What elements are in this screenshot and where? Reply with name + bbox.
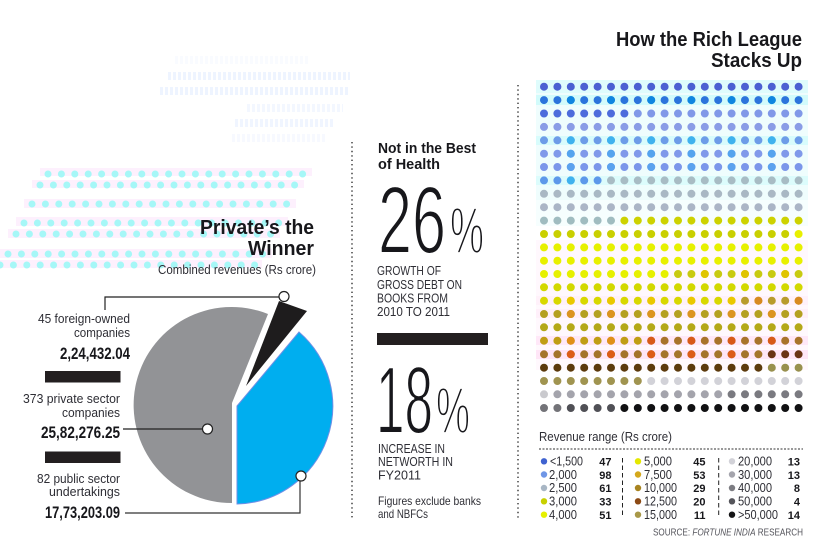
legend column 1 <box>541 454 612 522</box>
legend column 2 <box>635 454 706 522</box>
legend column 3: 13 <box>788 456 800 468</box>
label: public sector undertakings: undertakings <box>49 484 120 499</box>
heading: of Health <box>378 156 440 173</box>
label: private sector companies: 373 private sector <box>23 391 121 406</box>
leader line: foreign-owned <box>105 292 289 310</box>
dotted dividers <box>352 85 518 518</box>
halo bands <box>536 80 808 370</box>
legend column 1: 33 <box>599 496 612 508</box>
label: private sector companies: companies <box>62 405 120 420</box>
legend column 2: 5,000 <box>644 454 672 468</box>
legend column 2: 29 <box>693 483 706 495</box>
text: growth of gross debt: 2010 TO 2011 <box>377 304 450 319</box>
label: private sector companies: 25,82,276.25 <box>41 423 120 442</box>
leader line: public sector <box>125 471 306 513</box>
text: growth of gross debt: GROWTH OF <box>377 263 441 278</box>
label: foreign-owned companies: companies <box>74 325 130 340</box>
stat: 18%: % <box>436 373 470 447</box>
legend column 3: 40,000 <box>738 480 772 495</box>
legend title: Revenue range (Rs crore) <box>539 429 672 444</box>
legend column 2: 7,500 <box>644 467 672 482</box>
stat: 18%: 18 <box>376 347 433 454</box>
text: increase in networth: INCREASE IN <box>378 441 445 456</box>
label: foreign-owned companies: 2,24,432.04 <box>60 344 130 363</box>
subheading: Combined revenues: Combined revenues (Rs crore) <box>158 262 316 277</box>
legend: revenue range <box>539 429 803 522</box>
heading: How the Rich League Stacks Up: Stacks Up <box>711 50 802 72</box>
pie chart <box>134 301 333 504</box>
legend column 3: >50,000 <box>738 507 778 522</box>
bar divider 1 <box>45 371 120 382</box>
text: increase in networth: NETWORTH IN <box>378 454 453 469</box>
legend column 3: 30,000 <box>738 467 772 482</box>
text: increase in networth: FY2011 <box>378 468 421 482</box>
heading: Not in the Best <box>378 140 476 157</box>
note: figures exclude banks: and NBFCs <box>378 507 428 521</box>
dots <box>544 87 799 408</box>
source credit: SOURCE: FORTUNE INDIA RESEARCH <box>653 528 803 538</box>
text: growth of gross debt: GROSS DEBT ON <box>377 277 462 292</box>
stat: 26%: % <box>450 193 484 267</box>
panel: Not in the Best of Health <box>376 140 488 521</box>
note: figures exclude banks <box>378 494 481 521</box>
legend column 3: 13 <box>788 470 800 482</box>
ghost text artefacts <box>160 60 350 138</box>
slice: private sector <box>134 307 268 503</box>
legend column 3 <box>729 454 801 522</box>
legend column 2: 10,000 <box>644 480 677 495</box>
text: growth of gross debt <box>377 263 462 319</box>
text: growth of gross debt: BOOKS FROM <box>377 290 448 306</box>
legend column 2: 11 <box>694 510 706 522</box>
legend column 2: 12,500 <box>644 494 677 508</box>
legend column 3: 14 <box>788 510 801 522</box>
legend column 2: 15,000 <box>644 507 677 522</box>
dot matrix chart <box>536 80 808 408</box>
legend column 1: 51 <box>599 510 612 522</box>
leader line: private sector <box>123 424 212 434</box>
legend column 3: 8 <box>794 483 800 495</box>
heading: How the Rich League Stacks Up: How the Rich League <box>616 29 802 51</box>
heading: How the Rich League Stacks Up <box>616 29 802 72</box>
bar divider <box>377 333 488 345</box>
legend column 2: 20 <box>693 496 706 508</box>
stat: 26%: 26 <box>378 167 446 274</box>
note: figures exclude banks: Figures exclude banks <box>378 494 481 508</box>
label: private sector companies <box>23 391 121 442</box>
label: foreign-owned companies <box>38 311 130 363</box>
heading: Private's the Winner: Private’s the <box>200 217 314 239</box>
bar divider 2 <box>45 452 120 463</box>
slice: foreign-owned <box>246 301 307 386</box>
text: increase in networth <box>378 441 453 482</box>
ghost dot rows artefact <box>0 168 312 268</box>
legend column 3: 50,000 <box>738 494 772 508</box>
legend column 2: 45 <box>693 456 706 468</box>
legend column 1: <1,500 <box>550 454 583 468</box>
legend column 3: 20,000 <box>738 454 772 468</box>
legend column 1: 47 <box>599 456 612 468</box>
legend column 3: 4 <box>794 496 801 508</box>
label: foreign-owned companies: 45 foreign-owned <box>38 311 130 326</box>
legend column 1: 2,500 <box>549 480 577 495</box>
label: public sector undertakings <box>37 471 121 522</box>
legend column 1: 4,000 <box>549 507 577 522</box>
label: public sector undertakings: 17,73,203.09 <box>45 503 120 522</box>
legend column 2: 53 <box>693 470 706 482</box>
heading: Private's the Winner <box>200 217 314 260</box>
heading <box>378 140 476 173</box>
heading: Private's the Winner: Winner <box>248 238 314 260</box>
legend column 1: 2,000 <box>549 467 577 482</box>
legend column 1: 98 <box>599 470 612 482</box>
legend column 1: 3,000 <box>549 494 577 508</box>
slice: public sector <box>237 332 333 504</box>
label: public sector undertakings: 82 public sector <box>37 471 121 486</box>
legend column 1: 61 <box>599 483 612 495</box>
